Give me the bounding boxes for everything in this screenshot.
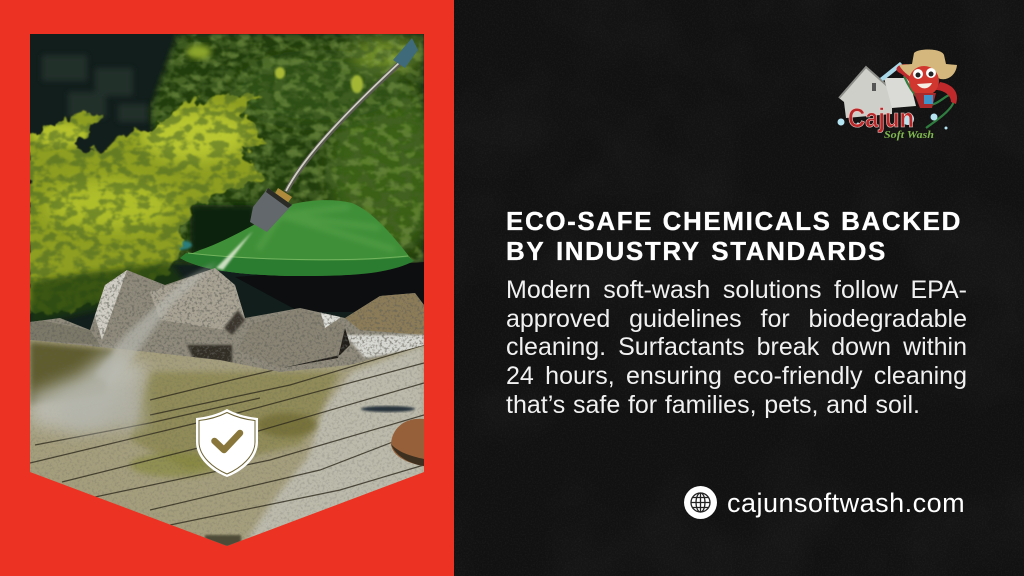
icon: shield with check mark xyxy=(196,409,258,477)
body text: cleaning. Surfactants break down within xyxy=(506,333,967,361)
dark stone wall xyxy=(30,34,424,334)
green hose xyxy=(904,76,954,128)
heading: ECO-SAFE CHEMICALS BACKED xyxy=(506,206,962,236)
house xyxy=(839,62,916,118)
dark green background hedge xyxy=(150,34,440,266)
body text xyxy=(506,276,967,419)
body text: Modern soft-wash solutions follow EPA- xyxy=(506,276,967,304)
website address: cajunsoftwash.com xyxy=(727,488,965,518)
paving xyxy=(30,340,424,552)
logo wordmark Soft Wash: Soft Wash xyxy=(884,129,934,141)
website link row xyxy=(684,486,965,519)
heading xyxy=(506,206,962,266)
green disc lid xyxy=(166,200,424,312)
rocks xyxy=(30,262,424,377)
logo: Cajun Soft Wash crawfish mascot xyxy=(838,50,957,141)
icon: globe xyxy=(684,486,717,519)
bubbles xyxy=(838,113,948,130)
work boot xyxy=(391,419,424,466)
crawfish mascot xyxy=(897,49,957,108)
spray mist xyxy=(30,231,253,432)
panel: red photo background xyxy=(0,0,454,576)
body text: that’s safe for families, pets, and soil. xyxy=(506,391,920,419)
photo: pressure washer cleaning patio xyxy=(30,34,424,546)
logo wordmark Cajun: Cajun xyxy=(848,103,914,133)
spray wand xyxy=(250,38,418,232)
body text: 24 hours, ensuring eco-friendly cleaning xyxy=(506,362,967,390)
body text: approved guidelines for biodegradable xyxy=(506,305,967,333)
yellow-green shrub xyxy=(28,85,278,325)
panel: dark textured background xyxy=(454,16,1024,576)
heading: BY INDUSTRY STANDARDS xyxy=(506,236,887,266)
